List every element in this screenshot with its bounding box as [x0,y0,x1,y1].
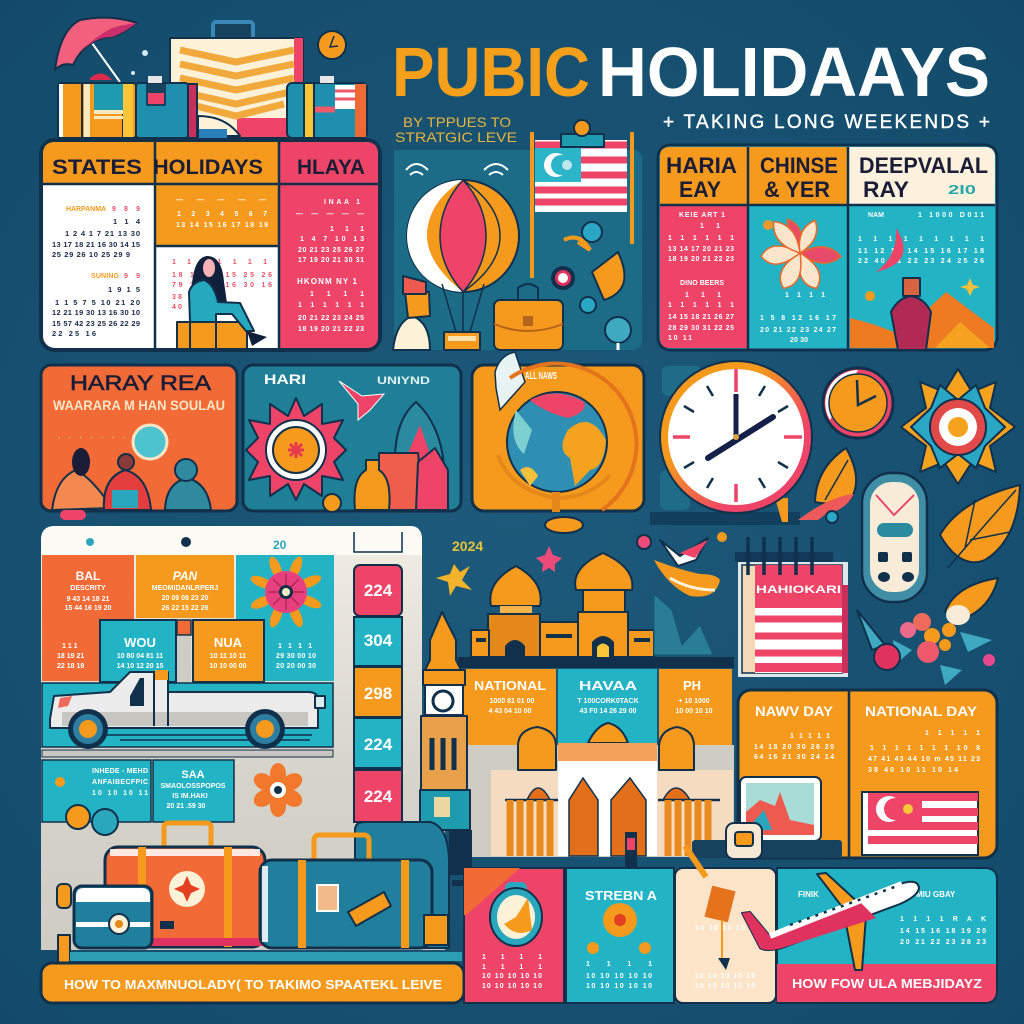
calendar: white block: 38 1 [172,294,192,301]
icon: pink star [536,546,562,572]
tagline: BY TPPUES TO [403,114,511,130]
block: notes tile [42,760,151,822]
panel: globe [472,352,644,533]
block: bal: 18 19 21 [57,653,84,660]
icon: berries and leaves [857,578,998,685]
calendar title: HAHIOKARI [756,584,841,596]
block: saa: SAA [181,769,205,781]
calendar: teal column lower [760,292,836,344]
block: wou [100,620,176,682]
icon: laptop [692,777,842,859]
header: deepavali ray: 2I0 [948,182,976,197]
date tabs: 304 [364,631,393,650]
calendar: pink column: 1 1 1 1 1 1 [668,302,734,309]
icon: decorative sun and star [865,278,980,301]
icon: malaysian flag on poles [532,120,632,278]
panel: large planner with truck [41,526,445,950]
year label: 2024: 2024 [452,538,483,554]
tagline [395,114,517,145]
icon: pickup truck [50,670,325,749]
block: bal: BAL [76,569,100,583]
heading right: MIU GBAY [916,890,956,899]
text: havaa dates [577,698,639,715]
block: pan: MEOMIDANLRPERJ [152,585,218,592]
heading: ph: PH [683,678,701,693]
panel: new day and national day [692,690,997,859]
calendar: orange block: 13 14 15 16 17 18 19 [176,222,268,229]
calendar: deepavali column: 1 1000 D011 [918,212,984,219]
header: haria eay: HARIA [666,153,737,178]
text: dates right: 47 41 43 44 10 m 45 11 23 [868,756,980,763]
calendar: deepavali column [858,212,984,265]
calendar: deepavali column: 22 40 21 22 23 24 25 26 [858,258,984,265]
panel: strbbn a tile [566,868,674,1003]
icon: remote device [862,473,927,602]
icon: balloon pin [495,352,525,410]
subheading: WAARARA M HAN SOULAU [53,397,225,413]
small dates: 20 21 22 23 28 23 [900,939,986,946]
calendar: white block: 1 1 1 1 1 1 1 [172,259,267,266]
text: dates left [754,733,834,761]
header: deepavali ray: RAY [863,177,909,202]
icon: orange suitcase [105,823,265,947]
title: HOLIDAAYS [598,33,990,111]
header: hlaya: HLAYA [297,156,365,179]
text: dates right [868,730,980,774]
header: deepavali ray [859,153,988,202]
calendar: deepavali column: 1 1 1 1 1 1 1 1 1 [858,236,984,243]
subtitle: + TAKING LONG WEEKENDS + [663,112,990,133]
heading: national: NATIONAL [474,678,546,693]
calendar: pink block: 20 21 22 23 24 25 [298,315,364,322]
calendar: left column [52,206,141,338]
label: all news: ALL NAWS [525,371,557,382]
small dates: 1 1 1 1 R A K [900,916,986,923]
calendar: pink block: 1 1 1 1 [310,291,364,298]
calendar: pink column: 10 11 [668,335,692,342]
header: states: STATES [52,156,142,179]
header: haria eay: EAY [679,177,721,202]
calendar: teal column lower: 1 1 1 1 [785,292,825,299]
panel: alarm clock tile [464,868,564,1003]
text: ph dates: + 10 1000 [678,698,710,705]
calendar: left column: 1 1 5 7 5 10 21 20 [55,298,140,307]
calendar: pink block: 1 1 1 1 1 1 [298,302,364,309]
calendar: pink column: 1 1 1 1 1 1 [668,235,734,242]
block: nua [193,620,264,682]
icon: sun [246,398,346,500]
heading: hari: HARI [264,371,306,387]
block: wou: WOU [124,635,156,650]
text: havaa dates: 43 F0 14 26 29 00 [580,708,637,715]
small dates [586,961,652,990]
block: bal: 22 18 19 [57,663,84,670]
icon: keys [66,805,118,835]
small dates: 10 10 10 10 10 [586,983,652,990]
calendar: left column: SUNING [91,273,120,280]
panel: finish holiday tile [777,868,997,1003]
small dates [900,916,986,946]
illustration: umbrella, book and suitcases [55,18,367,138]
icon: tag and strap [685,846,736,970]
block: bal [42,555,134,681]
date tabs: 224 [364,581,393,600]
block: bal: 9 43 14 18 21 [67,596,110,603]
text: havaa dates: T 100CORK0TACK [577,698,639,705]
header: chinese year [760,153,838,202]
icon: open book [170,22,303,138]
block: bal: DESCRITY [70,585,106,592]
banner: how to maximize: HOW TO MAXMNUOLADY( TO TAKIMO SPAATEKL LEIVE [64,977,442,992]
header: haria eay [666,153,737,202]
icon: bird over wave [637,532,727,597]
icon: malaysian flag [862,792,978,855]
heading: havaa: HAVAA [579,678,638,693]
calendar: left column: 1 9 1 5 [108,285,140,294]
icon: pink flower [249,555,323,629]
heading: HARAY REA [70,372,211,395]
calendar: deepavali column: 11 12 13 14 15 16 17 18 [858,248,984,255]
header: chinese year: CHINSE [760,153,838,178]
icon: golden flower [587,903,651,954]
small dates: 1 1 1 1 [482,964,542,971]
block: saa: SMAOLOSSPOPOS [161,783,226,790]
text: ph dates [676,698,713,715]
icon: right suitcases [287,76,367,138]
block: nua: 10 10 00 00 [210,663,247,670]
heading: nawv day: NAWV DAY [755,703,834,719]
icon: rock and pot [323,402,448,512]
block: pan [136,555,234,618]
block: nua: 10 11 10 11 [210,653,246,660]
calendar: pink column [668,212,734,342]
icon: star [436,564,472,596]
text: ph dates: 10 00 10 10 [676,708,713,715]
panel: haray rea [41,365,237,520]
block: saa [153,760,234,822]
banner: how to maximize [41,963,464,1003]
calendar: pink block: 17 19 20 21 30 31 [298,257,364,264]
icon: mountains [850,292,994,348]
header: chinese year: & YER [764,177,830,202]
small dates: 10 10 10 10 10 [482,983,542,990]
shelf bar [458,657,734,668]
block: flower tile: 20 20 00 30 [276,663,316,670]
block: notes tile: 10 10 10 11 [92,790,148,797]
text: dates right: 1 1 1 1 1 [925,730,980,737]
calendar: white block [172,259,272,311]
icon: bird [339,381,384,420]
title [392,33,990,111]
calendar: pink block: 20 21 23 25 26 27 [298,247,364,254]
calendar: pink block: INAA 1 [324,199,360,206]
text: national dates: 1000 81 01 00 [490,698,534,705]
text: dates left: 64 16 21 30 24 14 [754,754,834,761]
calendar: white block: 40 7 [172,304,192,311]
icon: beach umbrella [55,18,137,82]
illustration: luggage group [57,822,472,963]
calendar: deepavali column: NAM [868,212,884,219]
calendar: pink column: 14 15 18 21 26 27 [668,314,734,321]
calendar: pink block [296,199,364,333]
panel: cream tile [675,846,776,1003]
calendar: pink column: 1 1 1 [685,292,721,299]
panel: states holidays calendars [41,140,380,350]
title: PUBIC [392,33,590,111]
calendar: left column: 1 2 4 1 7 21 13 30 [65,229,140,238]
date tabs [354,565,402,822]
icon: man standing [891,278,931,350]
calendar: white block: 18 11 19 15 25 26 [172,272,272,279]
small dates: . . . . . . . . . . . [58,433,168,440]
block: saa: IS IM.HAKI [172,793,208,800]
icon: large wall clock [660,361,812,522]
calendar: left column: 13 17 18 21 16 30 14 15 [52,240,140,249]
calendar: orange block: 1 2 3 4 5 6 7 [177,211,267,218]
calendar: pink block: — — — — — [296,211,364,218]
block: flower tile: 1 1 1 1 [278,643,312,650]
small dates [695,925,755,990]
header: deepavali ray: DEEPVALAL [859,153,988,178]
date tabs: 224 [364,735,393,754]
heading: uniynd: UNIYND [377,375,430,387]
block: flower tile [236,555,334,681]
panel: travel balloon [393,120,642,350]
icon: mandala flower [901,369,1015,484]
calendar: pink column: 13 14 17 20 21 23 [668,246,734,253]
icon: chef figure [393,276,430,350]
calendar: left column: HARPANMA [66,206,106,213]
calendar: white block: 79 11 14 16 30 16 [172,282,272,289]
calendar: left column: 9 9 [124,273,140,280]
icon: small cooler [57,884,152,963]
panel: national tiles [463,669,734,857]
block: pan: 26 22 15 22 26 [162,605,208,612]
icon: small clock [823,368,893,438]
heading: national day: NATIONAL DAY [865,703,978,719]
calendar: pink column: 28 29 30 31 22 25 [668,325,734,332]
small dates: 10 10 10 10 [695,925,745,932]
block: notes tile: INHEDE - MEHD [92,768,148,775]
calendar: pink column: DINO BEERS [680,280,724,287]
small dates: 10 10 10 10 10 [482,973,542,980]
dark shelf under clock [650,512,800,525]
calendar: teal column lower: 20 21 22 23 24 27 [760,327,836,334]
panel: hari raya, chinese new year, deepavali [658,145,997,350]
calendar: pink block: 1 4 7 10 13 [300,236,364,243]
illustration: main palace [491,723,733,868]
text: national dates [489,698,534,715]
year label: 20 [273,538,287,552]
small dates: 10 10 10 10 10 [586,973,652,980]
calendar: pink block: 1 1 1 [330,226,364,233]
icon: large leaf [940,485,1020,568]
icon: left suitcases [58,76,197,138]
icon: woman seated on suitcase [177,256,267,349]
header: holidays: HOLIDAYS [153,156,263,179]
icon: blue suitcase [260,835,448,948]
block: bal: 15 44 16 19 20 [65,605,111,612]
text: dates left: 14 18 20 30 26 20 [754,744,834,751]
calendar: pink column: KEIE ART 1 [679,212,725,219]
icon: crescent moon [876,228,904,272]
heading left: FINIK [798,890,819,899]
calendar: teal column lower: 1 5 8 12 16 17 [760,315,836,322]
icon: orange flower [251,763,305,817]
calendar: pink block: HKONM NY 1 [297,277,358,286]
small dates: 10 10 10 10 10 [695,973,755,980]
calendar: left column: 1 1 4 [113,217,141,226]
small dates: 14 15 16 18 19 20 [900,928,986,935]
text: dates right: 38 40 10 11 10 14 [868,767,958,774]
calendar: teal column lower: 20 30 [790,337,808,344]
truck band [42,683,333,747]
calendar: left column: 22 25 16 [52,329,96,338]
calendar: pink column: 18 19 20 21 22 23 [668,256,734,263]
banner text: HOW FOW ULA MEBJIDAYZ [792,977,982,991]
calendar: pink block: 18 19 20 21 22 23 [298,326,364,333]
icon: hot air balloon [407,180,519,350]
calendar: left column: 15 57 42 23 25 26 22 29 [52,319,140,328]
illustration: clock tower [420,612,470,830]
block: wou: 14 10 12 20 15 [117,663,163,670]
text: dates right: 1 1 1 1 1 1 1 10 8 [870,745,980,752]
heading: STREBN A [585,888,658,903]
date tabs: 298 [364,684,392,703]
icon: orbit dots and leaf [551,222,631,350]
icon: group of people [52,425,211,520]
block: wou: 10 80 04 81 11 [117,653,163,660]
calendar: orange block [176,197,268,229]
panel: hari uniynd [243,365,461,512]
block: flower tile: 29 30 00 10 [276,653,316,660]
teal shelf [70,952,462,961]
date tabs: 224 [364,787,393,806]
illustration: upper mosque [471,553,713,657]
block: nua: NUA [214,635,243,650]
icon: desk calendar [735,537,848,677]
text: national dates: 4 43 04 10 00 [489,708,532,715]
icon: globe on stand [498,364,636,533]
text: dates left: 1 1 1 1 1 [790,733,830,740]
icon: wifi symbols [406,164,508,175]
small dates: 1 1 1 1 [586,961,652,968]
block: saa: 20 21 .59 30 [167,803,206,810]
calendar: left column: 9 8 9 [112,206,140,213]
icon: airplane [742,873,919,970]
small dates: 1 1 1 1 [482,954,542,961]
small dates [482,954,542,990]
icon: back teal bag [355,822,472,948]
calendar: left column: 25 29 26 10 25 29 9 [52,250,130,259]
calendar: left column: 12 21 19 30 13 16 30 10 [52,308,140,317]
block: bal: 1 1 1 [62,643,78,650]
icon: alarm clock [490,882,542,946]
calendar: pink column: 1 1 [700,223,720,230]
block: pan: PAN [173,569,198,583]
icon: briefcase [494,284,563,350]
icon: wall clock [318,31,346,59]
tagline: STRATGIC LEVE [395,129,517,145]
block: notes tile: ANFAIBECFPIC [92,779,148,786]
block: pan: 20 09 08 23 20 [162,595,208,602]
icon: leaf [798,448,856,523]
calendar: orange block: — — — — — [176,197,266,204]
icon: flower [760,216,842,292]
small dates: 10 10 10 10 10 [695,983,755,990]
